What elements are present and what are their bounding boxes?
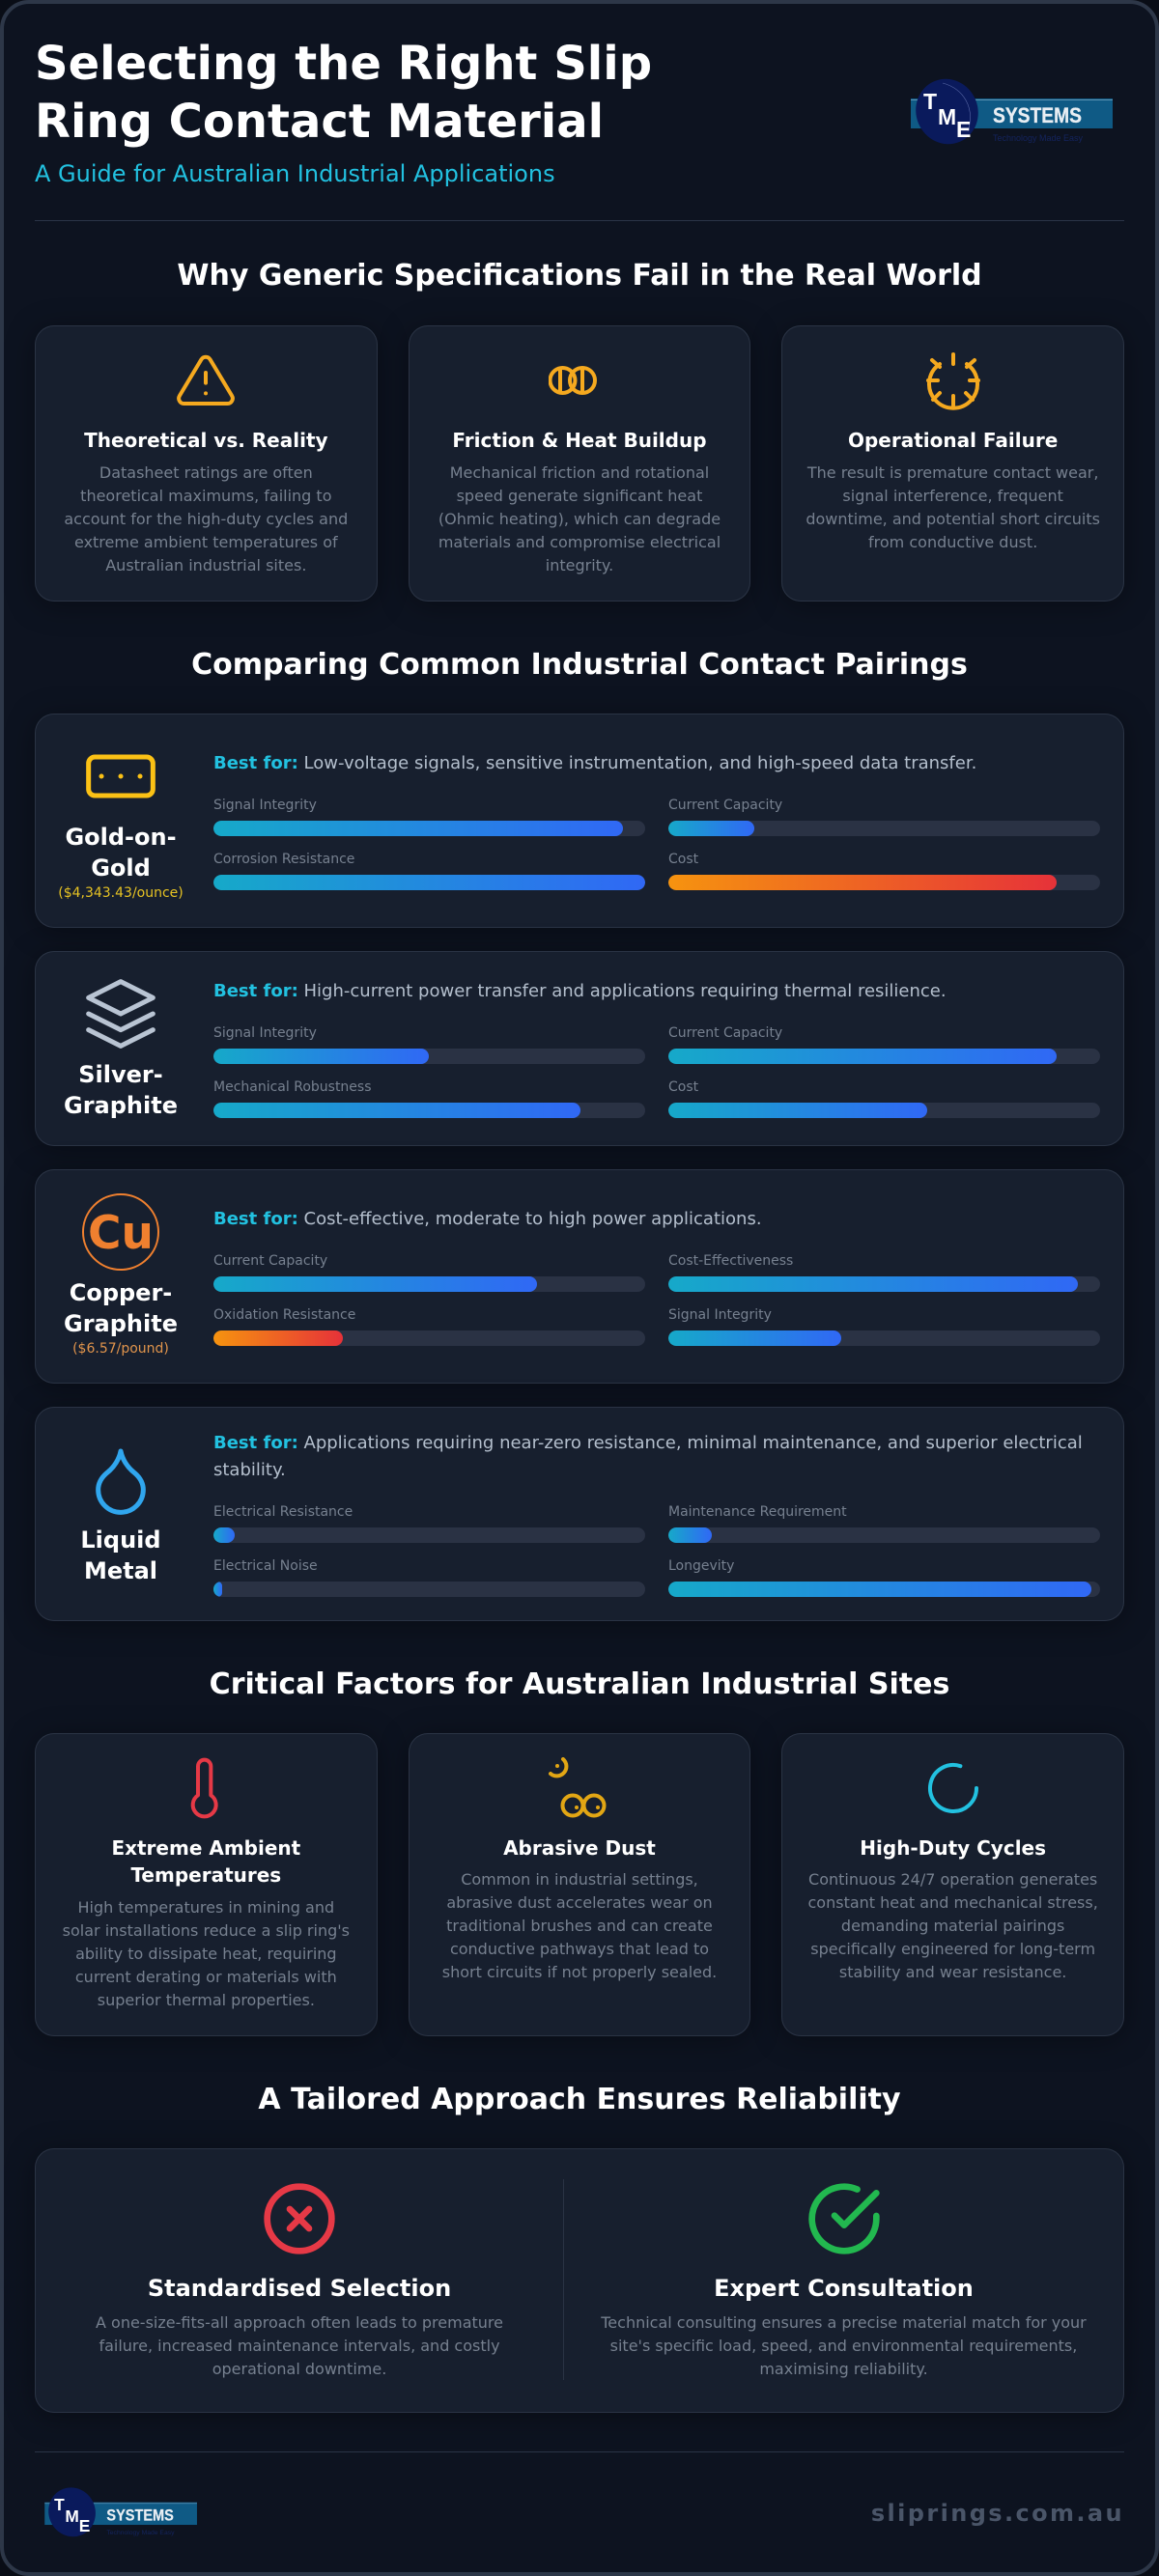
heading: comparing pairings: Comparing Common Industrial Contact Pairings: [191, 648, 968, 682]
metric: signal integrity: [213, 1025, 645, 1064]
metric: cost: Cost: [668, 1079, 698, 1095]
logo: TME Systems header: SYSTEMS: [993, 103, 1082, 127]
panel: copper-graphite: [35, 1169, 1124, 1384]
metric: longevity: Longevity: [668, 1558, 734, 1574]
card title: Friction & Heat Buildup: [452, 429, 707, 452]
column: expert consultation: [587, 2180, 1101, 2381]
icon: thermometer: [191, 1757, 218, 1819]
card text: conductive pathways that lead to: [450, 1940, 709, 1958]
card text: theoretical maximums, failing to: [80, 487, 331, 505]
material name: Silver-: [78, 1061, 163, 1088]
material name: Graphite: [64, 1092, 178, 1119]
column text: operational downtime.: [212, 2360, 386, 2378]
column text: site's specific load, speed, and environmental requirements,: [610, 2337, 1077, 2355]
best for text: stability.: [213, 1460, 286, 1480]
best for text: Best for: Applications requiring near-zero resistance, minimal maintenance, and superior electrical: [213, 1433, 1083, 1453]
metric: cost: [668, 1079, 1100, 1118]
panel: extreme ambient temperatures: [35, 1733, 378, 2036]
card text: [806, 463, 1100, 551]
material name: Metal: [84, 1557, 157, 1584]
panel: theoretical vs reality: [35, 325, 378, 602]
column text: A one-size-fits-all approach often leads to premature: [96, 2313, 503, 2332]
icon: cycle arc: [922, 1757, 984, 1819]
card title: Abrasive Dust: [503, 1836, 656, 1860]
metric: current capacity: [668, 1025, 1100, 1064]
heading: critical factors: Critical Factors for Australian Industrial Sites: [210, 1667, 949, 1701]
metric: maintenance requirement: Maintenance Requirement: [668, 1504, 847, 1520]
icon: warning triangle: [177, 355, 235, 406]
metric: current capacity: Current Capacity: [213, 1253, 327, 1269]
title: Ring Contact Material: [35, 95, 604, 149]
card text: [63, 1898, 350, 2009]
icon: gold contact: [86, 755, 155, 798]
logo: TME Systems header: T: [923, 89, 937, 114]
card text: Common in industrial settings,: [461, 1870, 698, 1889]
card text: specifically engineered for long-term: [810, 1940, 1095, 1958]
metric: maintenance requirement: [668, 1504, 1100, 1543]
card text: superior thermal properties.: [98, 1991, 315, 2009]
card text: (Ohmic heating), which can degrade: [438, 510, 721, 528]
panel: liquid metal: [35, 1407, 1124, 1621]
card text: abrasive dust accelerates wear on: [446, 1893, 713, 1912]
material name: [64, 1061, 178, 1119]
material name: Copper-: [70, 1279, 172, 1306]
icon: friction rings: [549, 366, 597, 395]
card text: The result is premature contact wear,: [807, 463, 1098, 482]
card text: ability to dissipate heat, requiring: [75, 1945, 337, 1963]
card text: [791, 1868, 1115, 1984]
panel: gold-on-gold: [35, 714, 1124, 928]
logo: TME Systems header: Technology Made Easy: [993, 133, 1084, 143]
icon: Cu element: [82, 1193, 159, 1271]
panel: friction and heat: [409, 325, 750, 602]
metric: longevity: [668, 1558, 1100, 1597]
metric: electrical noise: Electrical Noise: [213, 1558, 318, 1574]
card text: materials and compromise electrical: [438, 533, 721, 551]
metric: cost: [668, 852, 1100, 890]
logo: TME Systems header: M: [938, 104, 956, 129]
panel: abrasive dust: [409, 1733, 750, 2036]
column text: Technical consulting ensures a precise material match for your: [601, 2313, 1087, 2332]
column title: Expert Consultation: [714, 2275, 974, 2302]
column text: [59, 2311, 540, 2381]
card text: constant heat and mechanical stress,: [807, 1893, 1098, 1912]
column: standardised selection: [59, 2180, 540, 2381]
card text: speed generate significant heat: [457, 487, 702, 505]
logo: TME Systems footer: Technology Made Easy: [106, 2530, 175, 2536]
column text: maximising reliability.: [759, 2360, 928, 2378]
metric: cost: Cost: [668, 852, 698, 867]
card text: Australian industrial sites.: [105, 556, 306, 574]
logo: TME Systems header: E: [956, 117, 971, 142]
metric: cost-effectiveness: Cost-Effectiveness: [668, 1253, 793, 1269]
logo: TME Systems footer: E: [78, 2516, 90, 2535]
card title: Operational Failure: [848, 429, 1058, 452]
card title: High-Duty Cycles: [860, 1836, 1046, 1860]
card text: extreme ambient temperatures of: [74, 533, 338, 551]
price: ($6.57/pound): [72, 1341, 169, 1357]
title: Selecting the Right Slip: [35, 37, 652, 91]
metric: oxidation resistance: [213, 1307, 645, 1346]
card title: Extreme Ambient: [111, 1836, 300, 1860]
metric: current capacity: [668, 798, 1100, 836]
panel: selection comparison: [35, 2148, 1124, 2413]
card text: account for the high-duty cycles and: [64, 510, 348, 528]
metric: signal integrity: [213, 798, 645, 836]
price: ($4,343.43/ounce): [58, 885, 184, 901]
column title: Standardised Selection: [148, 2275, 451, 2302]
panel: operational failure: [781, 325, 1124, 602]
card title: Temperatures: [130, 1863, 281, 1887]
card text: Continuous 24/7 operation generates: [808, 1870, 1097, 1889]
icon: failure gauge: [926, 352, 980, 410]
metric: signal integrity: Signal Integrity: [213, 798, 317, 813]
card text: [418, 1868, 741, 1984]
metric: signal integrity: Signal Integrity: [668, 1307, 772, 1323]
card text: [64, 463, 348, 574]
logo: TME Systems footer: M: [65, 2506, 79, 2526]
metric: current capacity: Current Capacity: [668, 798, 782, 813]
icon: Cu element: Cu: [88, 1207, 154, 1260]
icon: dust particles: [549, 1757, 607, 1817]
metric: signal integrity: Signal Integrity: [213, 1025, 317, 1041]
metric: cost-effectiveness: [668, 1253, 1100, 1292]
metric: corrosion resistance: [213, 852, 645, 890]
panel: silver-graphite: [35, 951, 1124, 1146]
card text: traditional brushes and can create: [446, 1917, 713, 1935]
card text: demanding material pairings: [841, 1917, 1064, 1935]
panel: high-duty cycles: [781, 1733, 1124, 2036]
logo: TME Systems footer: SYSTEMS: [106, 2506, 174, 2524]
card text: stability and wear resistance.: [839, 1963, 1066, 1981]
metric: corrosion resistance: Corrosion Resistance: [213, 852, 354, 867]
card text: from conductive dust.: [868, 533, 1037, 551]
card text: Datasheet ratings are often: [99, 463, 313, 482]
card text: [438, 463, 721, 574]
card text: downtime, and potential short circuits: [806, 510, 1100, 528]
best for text: Best for: High-current power transfer and applications requiring thermal resilience.: [213, 981, 947, 1001]
card text: solar installations reduce a slip ring's: [63, 1921, 350, 1940]
icon: layers: [86, 979, 155, 1049]
footer website: sliprings.com.au: [871, 2500, 1124, 2527]
best for text: Best for: Cost-effective, moderate to high power applications.: [213, 1209, 762, 1229]
material name: Liquid: [80, 1526, 161, 1554]
metric: current capacity: Current Capacity: [668, 1025, 782, 1041]
card title: Theoretical vs. Reality: [84, 429, 328, 452]
column text: failure, increased maintenance intervals, and costly: [99, 2337, 500, 2355]
card text: High temperatures in mining and: [78, 1898, 334, 1917]
metric: oxidation resistance: Oxidation Resistance: [213, 1307, 355, 1323]
card text: Mechanical friction and rotational: [450, 463, 709, 482]
metric: current capacity: [213, 1253, 645, 1292]
metric: mechanical robustness: [213, 1079, 645, 1118]
heading: why generic specifications fail: Why Generic Specifications Fail in the Real World: [177, 259, 982, 293]
card title: [111, 1836, 300, 1887]
title: [35, 37, 652, 149]
icon: droplet: [96, 1448, 146, 1515]
logo: TME Systems header: [911, 79, 1113, 145]
logo: TME Systems footer: [42, 2486, 203, 2538]
subtitle: A Guide for Australian Industrial Applications: [35, 160, 555, 187]
card text: current derating or materials with: [75, 1968, 337, 1986]
column text: [587, 2311, 1101, 2381]
logo: TME Systems footer: T: [54, 2495, 65, 2514]
metric: mechanical robustness: Mechanical Robustness: [213, 1079, 372, 1095]
card text: integrity.: [546, 556, 613, 574]
heading: tailored approach: A Tailored Approach Ensures Reliability: [258, 2083, 901, 2116]
material name: Graphite: [64, 1310, 178, 1337]
metric: electrical noise: [213, 1558, 645, 1597]
material name: [64, 1279, 178, 1337]
best for text: [213, 1433, 1083, 1480]
icon: check circle: [806, 2180, 883, 2257]
material name: Gold-on-: [65, 824, 177, 851]
material name: Gold: [91, 854, 151, 882]
card text: short circuits if not properly sealed.: [442, 1963, 717, 1981]
icon: x circle: [261, 2180, 338, 2257]
material name: [65, 824, 177, 882]
best for text: Best for: Low-voltage signals, sensitive instrumentation, and high-speed data transfer.: [213, 753, 976, 773]
metric: electrical resistance: [213, 1504, 645, 1543]
metric: signal integrity: [668, 1307, 1100, 1346]
card text: signal interference, frequent: [842, 487, 1063, 505]
metric: electrical resistance: Electrical Resistance: [213, 1504, 353, 1520]
material name: [80, 1526, 161, 1584]
